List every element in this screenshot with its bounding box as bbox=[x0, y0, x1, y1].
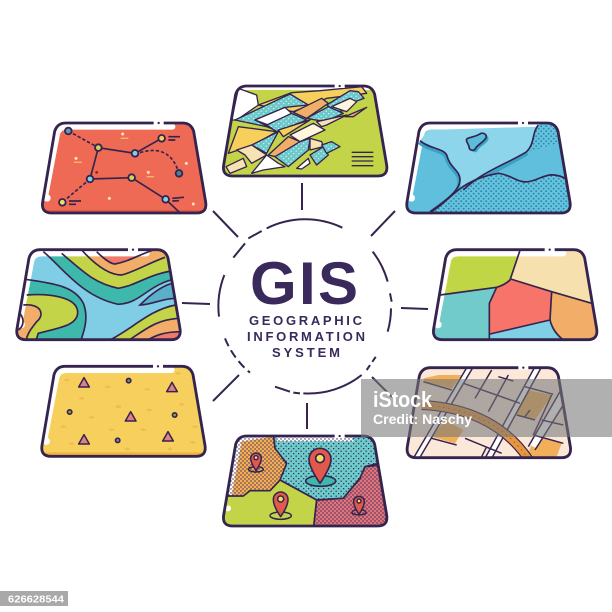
image id tag: 626628544 bbox=[8, 594, 64, 606]
watermark band: Credit: Naschy bbox=[373, 412, 473, 427]
subtitle: Geographic Information System: SYSTEM bbox=[272, 345, 340, 360]
watermark band: iStock bbox=[373, 387, 433, 412]
image id tag bbox=[0, 591, 68, 606]
panel: contour map bbox=[15, 247, 185, 343]
panel: coastal water map bbox=[405, 120, 575, 217]
icon: orange region pin bbox=[249, 453, 263, 472]
panel: land use map (top) bbox=[220, 83, 390, 180]
panel: parcel map bbox=[432, 248, 598, 342]
icon: green region pin bbox=[270, 492, 291, 519]
dashed circle around title bbox=[218, 219, 392, 393]
subtitle: Geographic Information System bbox=[247, 313, 365, 360]
subtitle: Geographic Information System: INFORMATION bbox=[247, 329, 365, 344]
panel: network constellation map bbox=[40, 120, 210, 217]
icon: pink region pin bbox=[352, 496, 366, 515]
panel: street map bbox=[403, 365, 573, 462]
panel: yellow point map bbox=[40, 363, 210, 460]
title: GIS: GIS bbox=[250, 250, 358, 317]
subtitle: Geographic Information System: GEOGRAPHIC bbox=[249, 313, 363, 328]
icon: large map pin bbox=[306, 448, 336, 486]
connector spokes bbox=[182, 183, 428, 429]
panel: location pin map bbox=[220, 433, 392, 530]
watermark band bbox=[361, 379, 612, 437]
icon: island bbox=[466, 133, 489, 152]
